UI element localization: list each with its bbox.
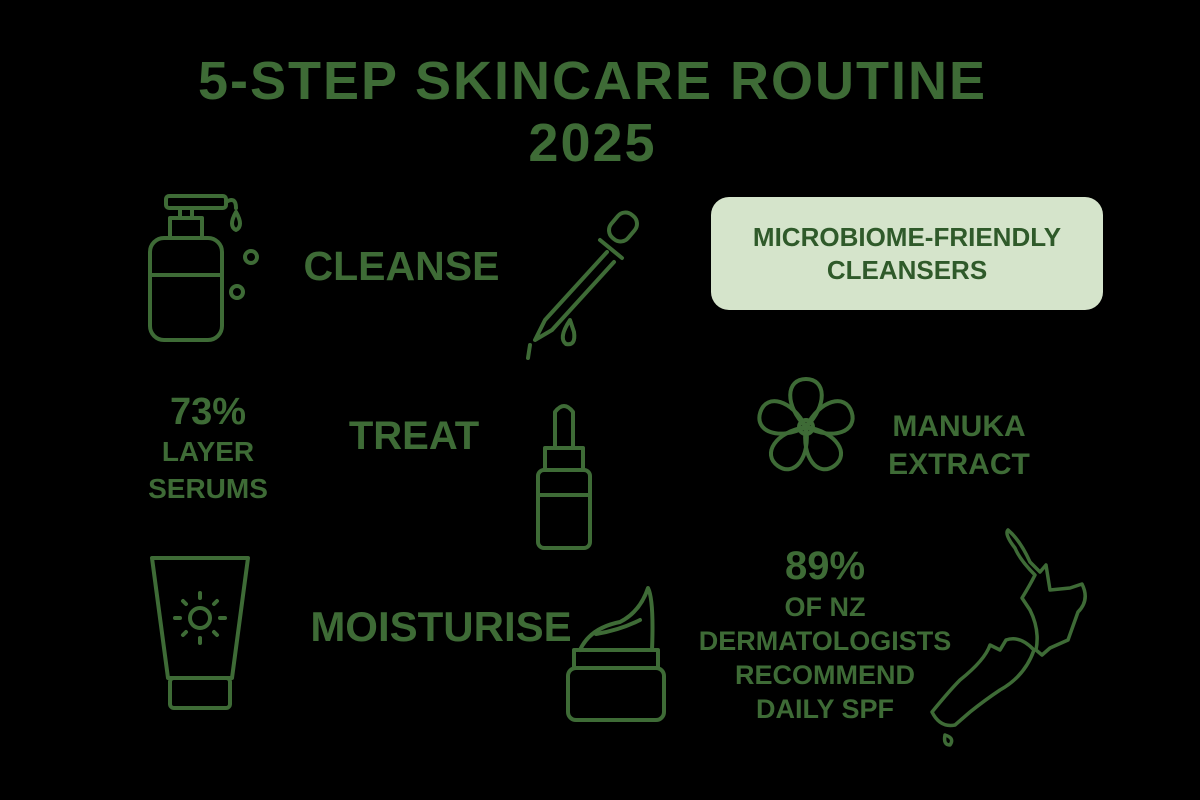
- stat: 89%: DERMATOLOGISTS: [699, 626, 951, 656]
- stat: 89%: 89%: [785, 544, 865, 588]
- stat: 73%: [148, 391, 268, 504]
- label: manuka: MANUKA: [892, 410, 1026, 443]
- callout: microbiome: [711, 197, 1103, 310]
- icon: flower: [755, 379, 857, 475]
- label: manuka: [888, 410, 1030, 481]
- icon: dropper: [528, 208, 641, 358]
- stat: 89%: OF NZ: [784, 592, 866, 622]
- icon: serum bottle: [538, 406, 590, 548]
- stat: 73%: LAYER: [162, 436, 254, 467]
- stat: 89%: RECOMMEND: [735, 660, 915, 690]
- callout: microbiome: CLEANSERS: [827, 254, 987, 284]
- label: treat: TREAT: [349, 414, 479, 458]
- title: 5-STEP SKINCARE ROUTINE: [198, 51, 987, 111]
- callout: microbiome: MICROBIOME-FRIENDLY: [753, 222, 1061, 252]
- label: manuka: EXTRACT: [888, 448, 1030, 481]
- stat: 89%: DAILY SPF: [756, 694, 894, 724]
- icon: NZ map: [932, 530, 1085, 745]
- stat: 89%: [699, 544, 951, 724]
- label: moisturise: MOISTURISE: [310, 603, 572, 650]
- icon: pump bottle: [150, 196, 257, 340]
- icon: sunscreen tube: [152, 558, 248, 708]
- stat: 73%: 73%: [170, 391, 246, 433]
- stat: 73%: SERUMS: [148, 473, 268, 504]
- label: cleanse: CLEANSE: [304, 243, 499, 289]
- title: [198, 51, 987, 173]
- title: 2025: [528, 113, 657, 173]
- icon: cream jar: [568, 588, 664, 720]
